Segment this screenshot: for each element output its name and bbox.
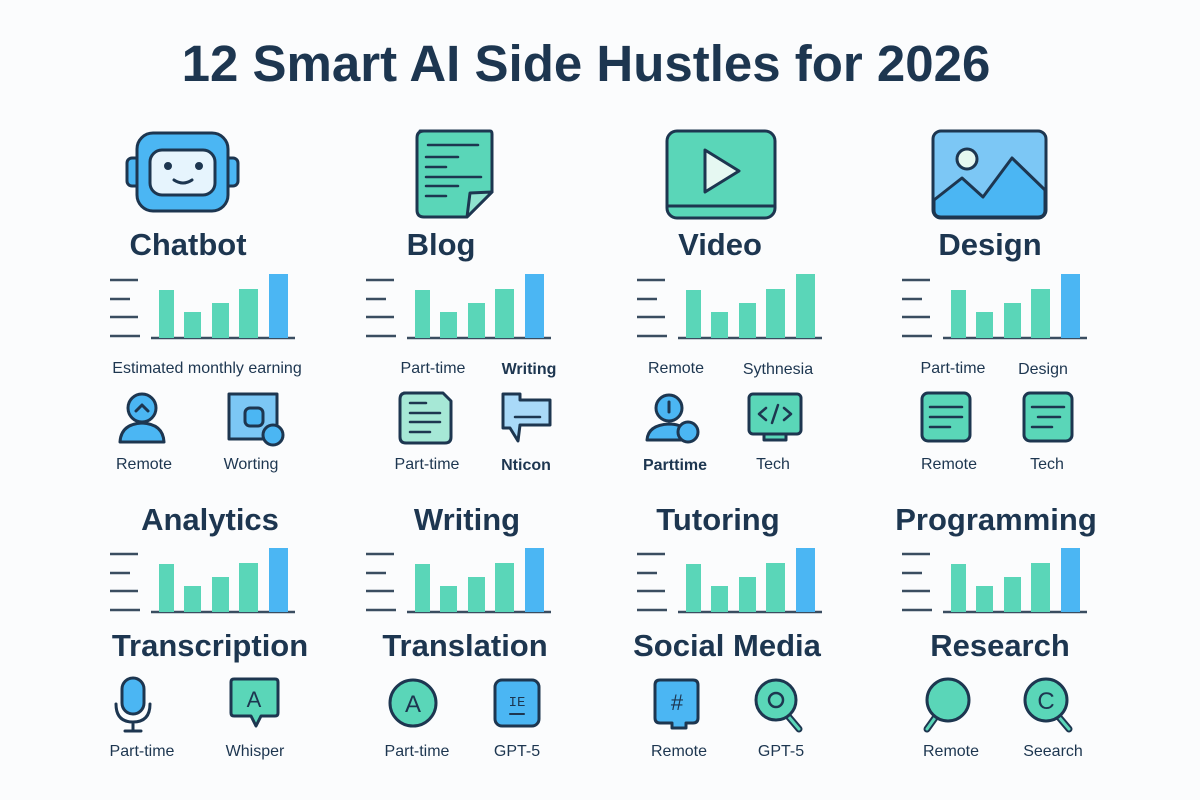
heading: Video: Video [678,227,762,262]
icon: microphone [116,678,150,731]
icon: blog [417,131,492,217]
text: GPT-5 [494,743,540,760]
text: Remote [651,743,707,760]
icon: parttime person [647,395,698,442]
chart: Design [902,274,1087,338]
text: Seearch [1023,743,1083,760]
icon: A bubble: A [247,687,262,712]
icon: code monitor [749,394,801,440]
icon: search remote [927,679,969,729]
heading: Research: Research [930,628,1070,663]
heading: Blog: Blog [407,227,475,262]
text: Tech [756,456,790,473]
chart: Writing [366,548,551,612]
icon: A bubble [231,679,278,726]
text: Sythnesia [743,361,813,378]
text: Parttime [643,457,707,474]
icon: A circle: A [405,691,421,718]
text: Tech [1030,456,1064,473]
text: Design [1018,361,1068,378]
text: Worting [224,456,278,473]
icon: hashtag bubble [655,680,698,728]
text: Remote [116,456,172,473]
icon: design image [933,131,1046,218]
text: Remote [921,456,977,473]
heading: Programming: Programming [895,502,1097,537]
chart: Programming [902,548,1087,612]
text: Part-time [395,456,460,473]
icon: translate box [495,680,539,726]
chart: Analytics [110,548,295,612]
heading: Chatbot: Chatbot [129,227,247,262]
label: Estimated monthly earning [112,360,302,377]
title: 12 Smart AI Side Hustles for 2026 [182,35,990,92]
chart: Tutoring [637,548,822,612]
icon: chat [503,394,550,441]
icon: search O [756,680,799,729]
icon: translate box: IE [509,695,525,711]
icon: search C: C [1037,688,1055,715]
icon: doc remote [922,393,970,441]
text: Part-time [921,360,986,377]
icon: A circle [390,680,436,726]
text: Writing [502,361,556,378]
text: Remote [648,360,704,377]
text: Part-time [385,743,450,760]
chart: Blog [366,274,551,338]
heading: Writing: Writing [414,502,520,537]
chart: Chatbot [110,274,295,338]
text: Remote [923,743,979,760]
text: Whisper [226,743,285,760]
heading: Analytics: Analytics [141,502,279,537]
heading: Translation: Translation [382,628,548,663]
icon: search C [1025,679,1069,729]
icon: hashtag bubble: # [671,690,684,715]
heading: Design: Design [938,227,1042,262]
icon: remote person [120,394,164,442]
text: Part-time [110,743,175,760]
text: Part-time [401,360,466,377]
icon: worting [229,394,283,445]
icon: chatbot [127,133,238,211]
heading: Transcription: Transcription [112,628,308,663]
heading: Social Media: Social Media [633,628,822,663]
icon: video [667,131,775,218]
icon: document [400,393,451,443]
heading: Tutoring: Tutoring [656,502,780,537]
text: Nticon [501,457,551,474]
icon: doc tech [1024,393,1072,441]
chart: Video [637,274,822,338]
text: GPT-5 [758,743,804,760]
